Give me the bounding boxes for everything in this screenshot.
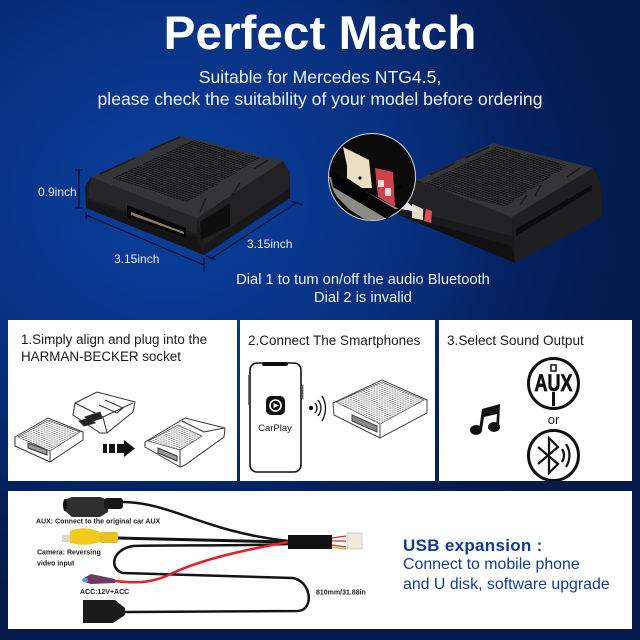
usb expansion text: and U disk, software upgrade: [403, 576, 610, 593]
or label: or: [548, 412, 560, 427]
cable labels: ACC:12V+ACC: [80, 589, 129, 596]
aux connector: [63, 497, 123, 517]
tray: [73, 392, 135, 433]
aux wire: [123, 502, 288, 541]
arrow: [103, 440, 135, 457]
step 2 illustration: [248, 362, 428, 473]
step 1 text: HARMAN-BECKER socket: [21, 348, 181, 364]
small dial connector: [412, 204, 423, 220]
panel: step 3: [439, 320, 632, 481]
module: [333, 380, 427, 438]
right device with dial zoom: [328, 134, 602, 263]
bluetooth icon: [528, 430, 578, 480]
cable labels: video input: [37, 560, 75, 568]
step 2 text: 2.Connect The Smartphones: [248, 333, 420, 348]
module: [15, 418, 83, 462]
camera connector: [62, 528, 118, 545]
usb expansion text: Connect to mobile phone: [403, 556, 580, 573]
subtitle: [98, 67, 542, 109]
product illustrations: [38, 133, 602, 272]
dimension labels: 3.15inch: [247, 237, 292, 251]
plugged module: [145, 418, 225, 467]
title: Perfect Match: [164, 7, 476, 60]
dimension labels: [38, 185, 292, 266]
subtitle: please check the suitability of your model before ordering: [98, 89, 542, 109]
left device connector: [127, 205, 186, 238]
wireless waves: [310, 396, 326, 421]
music note: [470, 404, 500, 435]
dial note: [236, 272, 490, 306]
usb expansion text: [403, 556, 610, 593]
cable labels: 810mm/31.88in: [316, 590, 366, 596]
step 1 illustration: [14, 392, 226, 468]
step 3 icons: [470, 357, 580, 481]
left device body: [85, 136, 290, 255]
cable labels: Camera: Reversing: [37, 550, 101, 556]
panel: cable and USB expansion: [8, 491, 632, 629]
carplay icon: [266, 396, 285, 415]
carplay label: CarPlay: [258, 423, 292, 434]
cable labels: [36, 518, 366, 596]
dial note: Dial 2 is invalid: [314, 290, 412, 306]
panel: step 2: [240, 320, 435, 481]
aux icon: [528, 358, 578, 408]
dimension labels: 0.9inch: [38, 185, 77, 199]
aux icon: AUX: [534, 370, 572, 397]
right device body: [397, 143, 602, 263]
usb connector: [83, 600, 125, 623]
panel: step 1: [8, 320, 237, 481]
phone: [248, 362, 304, 472]
harness sleeve and plug: [288, 533, 362, 549]
acc plug: [82, 574, 115, 584]
cable labels: AUX: Connect to the original car AUX: [36, 518, 161, 526]
step 1 text: [21, 332, 207, 364]
dimension lines: [75, 170, 303, 272]
step 3 text: 3.Select Sound Output: [447, 333, 584, 348]
dial note: Dial 1 to tum on/off the audio Bluetooth: [236, 272, 490, 288]
magnified dial circle: [328, 134, 418, 220]
camera wire: [118, 538, 288, 542]
dimension labels: 3.15inch: [114, 252, 159, 266]
usb expansion heading: USB expansion :: [403, 536, 543, 555]
left device with dimensions: [38, 136, 303, 272]
subtitle: Suitable for Mercedes NTG4.5,: [199, 67, 441, 87]
cable diagram: [36, 497, 366, 623]
loop wire: [114, 544, 309, 612]
red wire: [115, 542, 288, 582]
step 1 text: 1.Simply align and plug into the: [21, 332, 207, 347]
